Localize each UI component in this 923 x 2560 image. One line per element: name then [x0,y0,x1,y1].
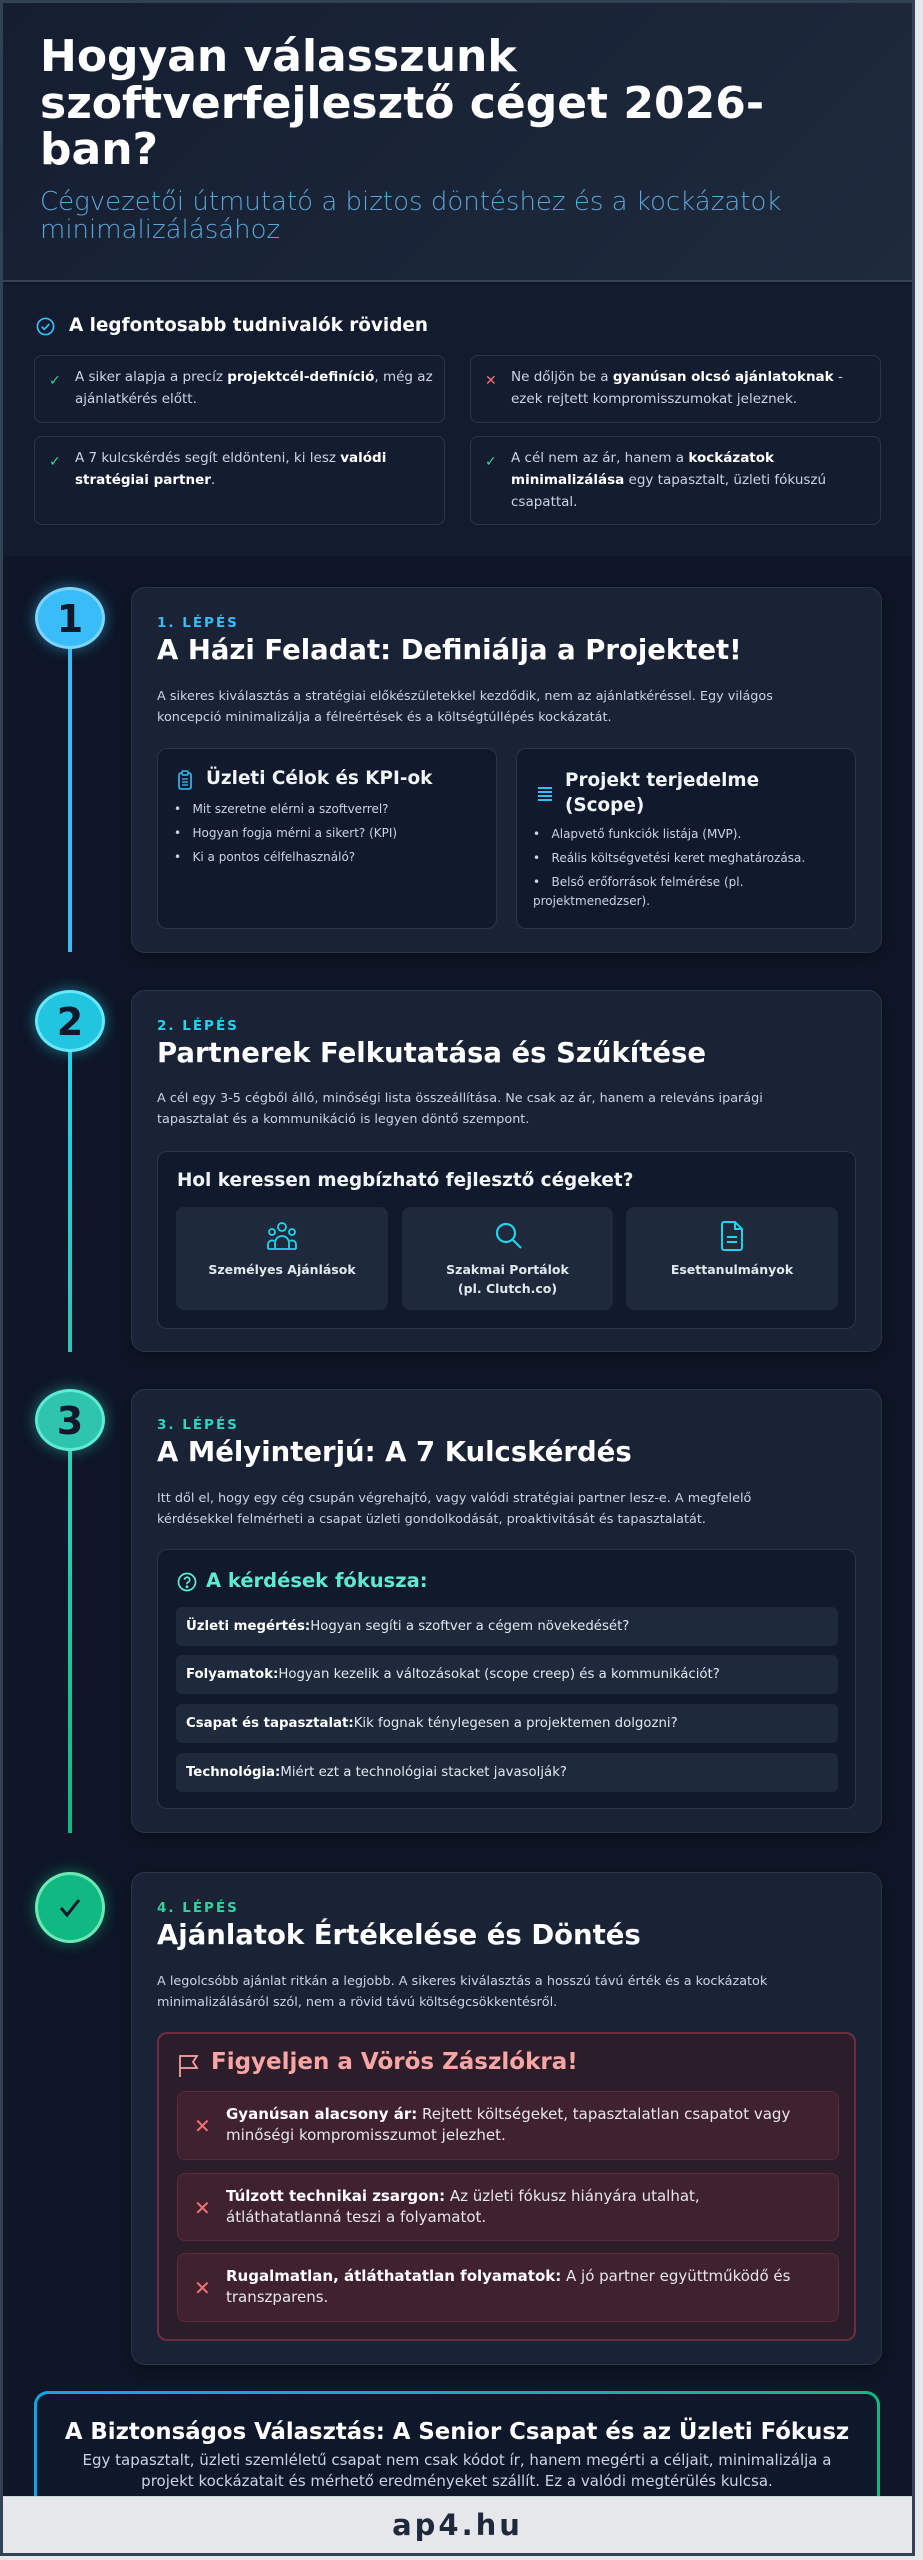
where to search box: Hol keressen megbízható fejlesztő cégeket? [177,1170,633,1191]
conclusion text: Egy tapasztalt, üzleti szemléletű csapat nem csak kódot ír, hanem megérti a céljait, minimalizálja a [83,2451,831,2469]
footer brand [3,2496,912,2553]
step 2 description: tapasztalat és a kommunikáció is legyen döntő szempont. [157,1112,529,1127]
step 1 description: koncepció minimalizálja a félreértések és a költségtúllépés kockázatát. [157,710,612,725]
title: szoftverfejlesztő céget 2026- [40,78,764,128]
conclusion title: A Biztonságos Választás: A Senior Csapat és az Üzleti Fókusz [65,2419,849,2445]
question focus box: Folyamatok:Hogyan kezelik a változásokat (scope creep) és a kommunikációt? [186,1667,720,1682]
step 3 description: Itt dől el, hogy egy cég csupán végrehajtó, vagy valódi stratégiai partner lesz-e. A megfelelő [157,1491,751,1506]
question focus box [157,1549,856,1809]
subcard: scope: Projekt terjedelme [565,770,759,791]
subcard: scope [516,748,856,929]
header band [3,3,912,282]
step 4 description [157,1974,768,2010]
summary card 4: ✓ [485,454,497,470]
subcard: scope: • Reális költségvetési keret meghatározása. [533,851,805,865]
title: ban? [40,124,158,175]
red flags box: Figyeljen a Vörös Zászlókra! [211,2049,578,2075]
tile: portals: Szakmai Portálok [446,1262,569,1277]
timeline line 3 [68,1445,72,1833]
step 1 circle [35,587,105,649]
subcard: scope: (Scope) [565,795,644,816]
title: Hogyan válasszunk [40,31,517,82]
footer brand: ap4.hu [392,2508,523,2542]
summary card 1 [34,355,445,423]
conclusion text [83,2451,831,2490]
summary heading: A legfontosabb tudnivalók röviden [69,315,428,336]
question rows [176,1607,838,1646]
step 3 circle: 3 [57,1399,83,1443]
step 2 card [131,990,882,1352]
step 1 title: A Házi Feladat: Definiálja a Projektet! [157,634,742,666]
red flag item 3 [177,2253,839,2322]
tile: case studies: Esettanulmányok [671,1262,793,1277]
icon: list [538,787,552,801]
step 1 description: A sikeres kiválasztás a stratégiai előkészületekkel kezdődik, nem az ajánlatkéréssel. Egy világos [157,689,773,704]
step 1 card [131,587,882,953]
red flags box [157,2032,856,2341]
conclusion box [34,2391,880,2551]
subcard: scope: • Alapvető funkciók listája (MVP). [533,827,741,841]
step 3 card [131,1389,882,1833]
tile: portals [402,1207,613,1310]
subtitle: Cégvezetői útmutató a biztos döntéshez és a kockázatok [40,187,781,217]
summary card 4 [470,436,881,525]
step 2 circle [35,990,105,1052]
step 4 description: minimalizálásáról szól, nem a rövid távú költségcsökkentésről. [157,1995,557,2010]
tile: portals: (pl. Clutch.co) [458,1281,557,1296]
summary card 1: A siker alapja a precíz projektcél-definíció, még az ajánlatkérés előtt. [75,369,433,407]
step 3 circle [35,1389,105,1451]
tile: case studies [626,1207,838,1310]
red flag item 2: Túlzott technikai zsargon: Az üzleti fókusz hiányára utalhat, [226,2187,700,2205]
step 3 title: A Mélyinterjú: A 7 Kulcskérdés [157,1436,632,1468]
step 1 label: 1. LÉPÉS [157,615,239,631]
red flag item 3: Rugalmatlan, átláthatatlan folyamatok: A jó partner együttműködő és transzparens. [226,2267,790,2306]
subcard: business goals: Üzleti Célok és KPI-ok [206,768,432,789]
step 4 card [131,1872,882,2365]
tile: personal referrals [176,1207,388,1310]
red flag item 1: Gyanúsan alacsony ár: Rejtett költségeket, tapasztalatlan csapatot vagy minőségi kompromisszumot jelezhet. [226,2105,790,2144]
conclusion text: projekt kockázatait és mérhető eredményeket szállít. Ez a valódi megtérülés kulcsa. [141,2472,773,2490]
where to search box [157,1151,856,1329]
subtitle: minimalizálásához [40,215,280,245]
step 1 description [157,689,773,725]
question focus box: A kérdések fókusza: [206,1569,428,1592]
tile: personal referrals: Személyes Ajánlások [208,1262,356,1277]
subtitle [40,187,781,245]
title [40,31,764,175]
timeline line 2 [68,1045,72,1352]
step 3 label: 3. LÉPÉS [157,1417,239,1433]
icon: check circle [36,318,54,336]
summary card 3: A 7 kulcskérdés segít eldönteni, ki lesz valódi stratégiai partner. [75,450,386,488]
step 2 description: A cél egy 3-5 cégből álló, minőségi lista összeállítása. Ne csak az ár, hanem a releváns iparági [157,1091,763,1106]
step 4 circle [35,1872,105,1943]
summary section [3,284,912,556]
icon: checkmark [60,1899,80,1918]
icon: question [178,1572,196,1592]
subcard: scope: • Belső erőforrások felmérése (pl. [533,875,743,889]
subcard: business goals: • Ki a pontos célfelhasználó? [174,850,355,864]
step 1 circle: 1 [57,597,83,641]
summary card 1: ✓ [49,373,61,389]
question focus box: Csapat és tapasztalat:Kik fognak ténylegesen a projektemen dolgozni? [186,1716,678,1731]
red flag item 3: ✕ [194,2276,211,2300]
subcard: business goals [157,748,497,929]
summary card 4: A cél nem az ár, hanem a kockázatok minimalizálása egy tapasztalt, üzleti fókuszú csapattal. [511,450,826,510]
summary card 2: Ne dőljön be a gyanúsan olcsó ajánlatoknak - ezek rejtett kompromisszumokat jeleznek. [511,369,843,407]
icon: search [496,1222,522,1249]
step 4 description: A legolcsóbb ajánlat ritkán a legjobb. A sikeres kiválasztás a hosszú távú érték és a kockázatok [157,1974,767,1989]
step 4 label: 4. LÉPÉS [157,1900,239,1916]
step 4 title: Ajánlatok Értékelése és Döntés [157,1919,641,1951]
subcard: scope: projektmenedzser). [533,894,650,908]
step 3 description: kérdésekkel felmérheti a csapat üzleti gondolkodását, proaktivitását és tapasztalatát. [157,1512,706,1527]
step 2 circle: 2 [57,1000,83,1044]
question focus box: Technológia:Miért ezt a technológiai stacket javasolják? [186,1765,567,1780]
question rows: Üzleti megértés:Hogyan segíti a szoftver a cégem növekedését? [186,1619,629,1634]
subcard: business goals: • Mit szeretne elérni a szoftverrel? [174,802,389,816]
summary card 3 [34,436,445,525]
timeline line 1 [68,640,72,952]
red flag item 1 [177,2091,839,2160]
red flag item 2: átláthatatlanná teszi a folyamatot. [226,2208,486,2226]
step 2 label: 2. LÉPÉS [157,1018,239,1034]
icon: document [721,1221,743,1251]
step 2 title: Partnerek Felkutatása és Szűkítése [157,1037,706,1069]
icon: flag [179,2055,198,2077]
summary card 2 [470,355,881,423]
red flag item 2: ✕ [194,2196,211,2220]
icon: clipboard [178,770,192,790]
red flag item 1: ✕ [194,2114,211,2138]
subcard: business goals: • Hogyan fogja mérni a sikert? (KPI) [174,826,397,840]
step 2 description [157,1091,763,1127]
red flag item 2 [177,2173,839,2241]
summary card 3: ✓ [49,454,61,470]
step 3 description [157,1491,751,1527]
icon: people [267,1222,297,1250]
summary card 2: ✕ [485,373,497,389]
